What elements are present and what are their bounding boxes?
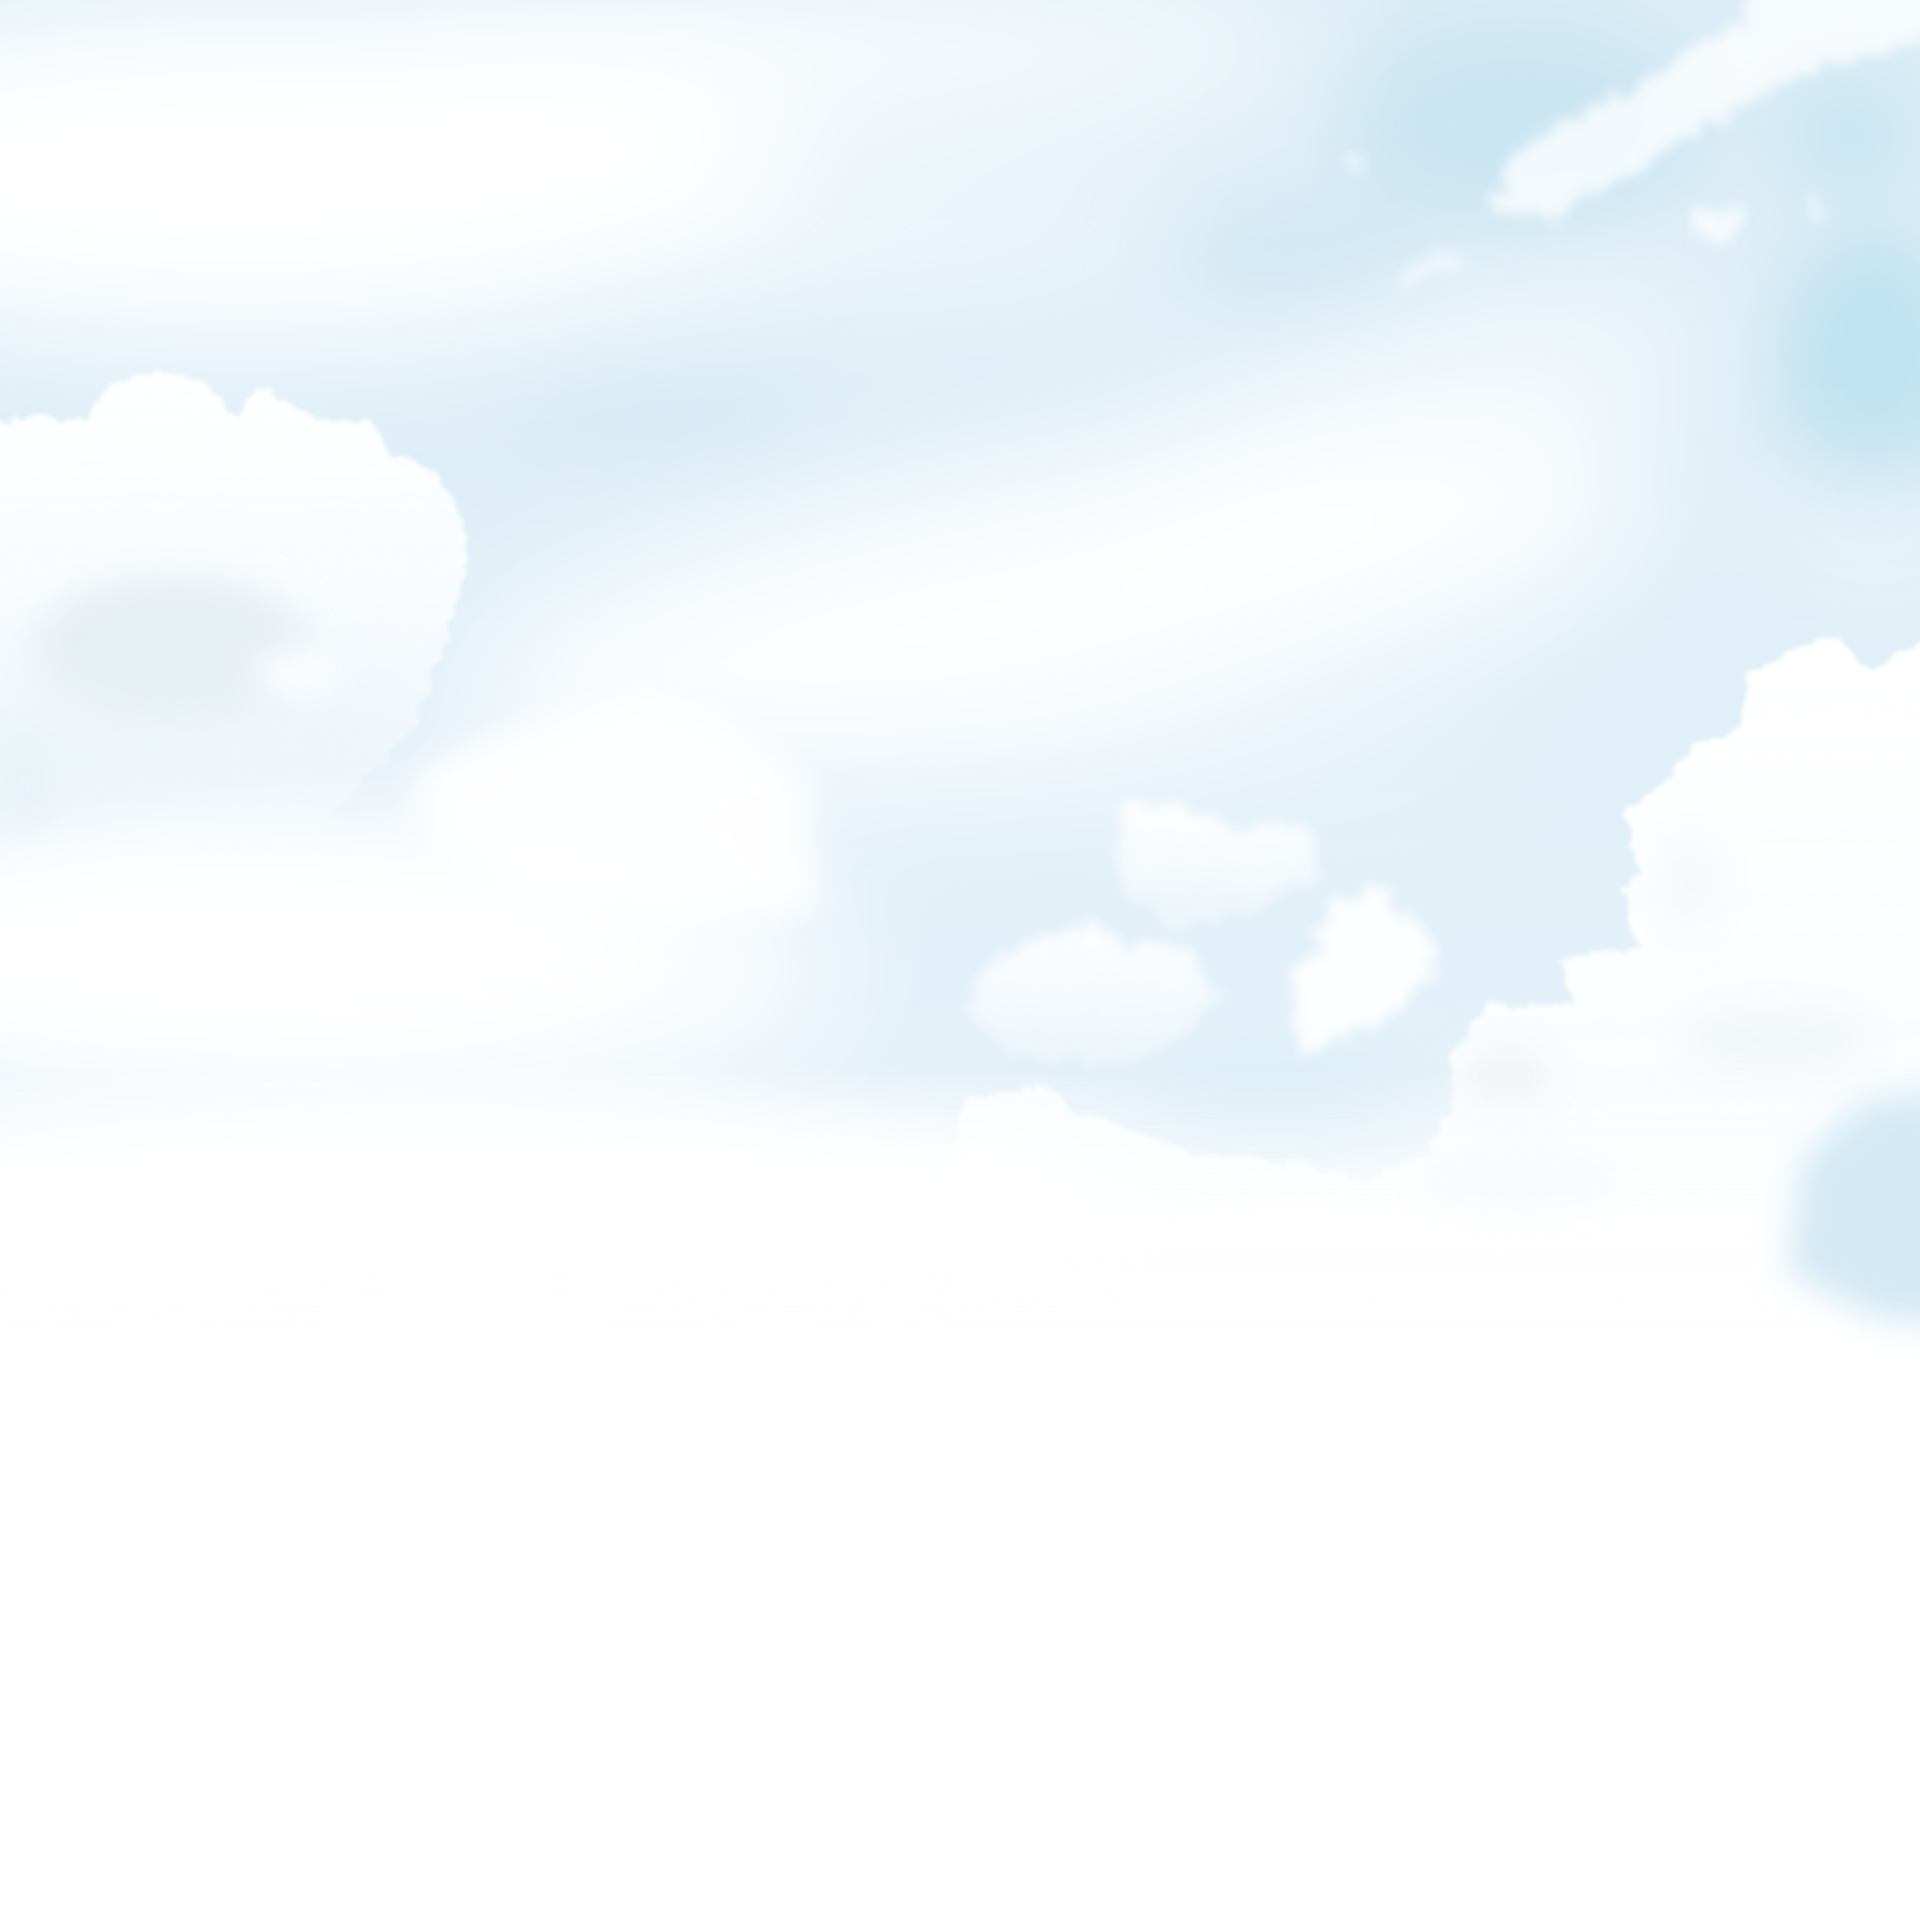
central puff cloud xyxy=(1298,888,1433,1059)
lower right blue sky glimpse xyxy=(1788,1090,1920,1328)
solid white lower area xyxy=(0,1332,1920,1905)
middle left hazy cloud xyxy=(416,692,820,924)
upper right wispy cloud xyxy=(1342,0,1920,289)
left large cumulus cloud xyxy=(0,371,468,881)
right large cumulus cloud xyxy=(931,632,1920,1347)
white fade to the lower page xyxy=(0,1065,1920,1334)
central small clouds xyxy=(967,802,1329,1065)
sky base gradient xyxy=(0,0,1920,1334)
left white fade band xyxy=(0,1102,1102,1298)
lower left white haze xyxy=(0,839,661,1047)
deeper blue sky patches xyxy=(502,12,1920,1151)
soft white cirrus layers xyxy=(0,0,1920,1120)
